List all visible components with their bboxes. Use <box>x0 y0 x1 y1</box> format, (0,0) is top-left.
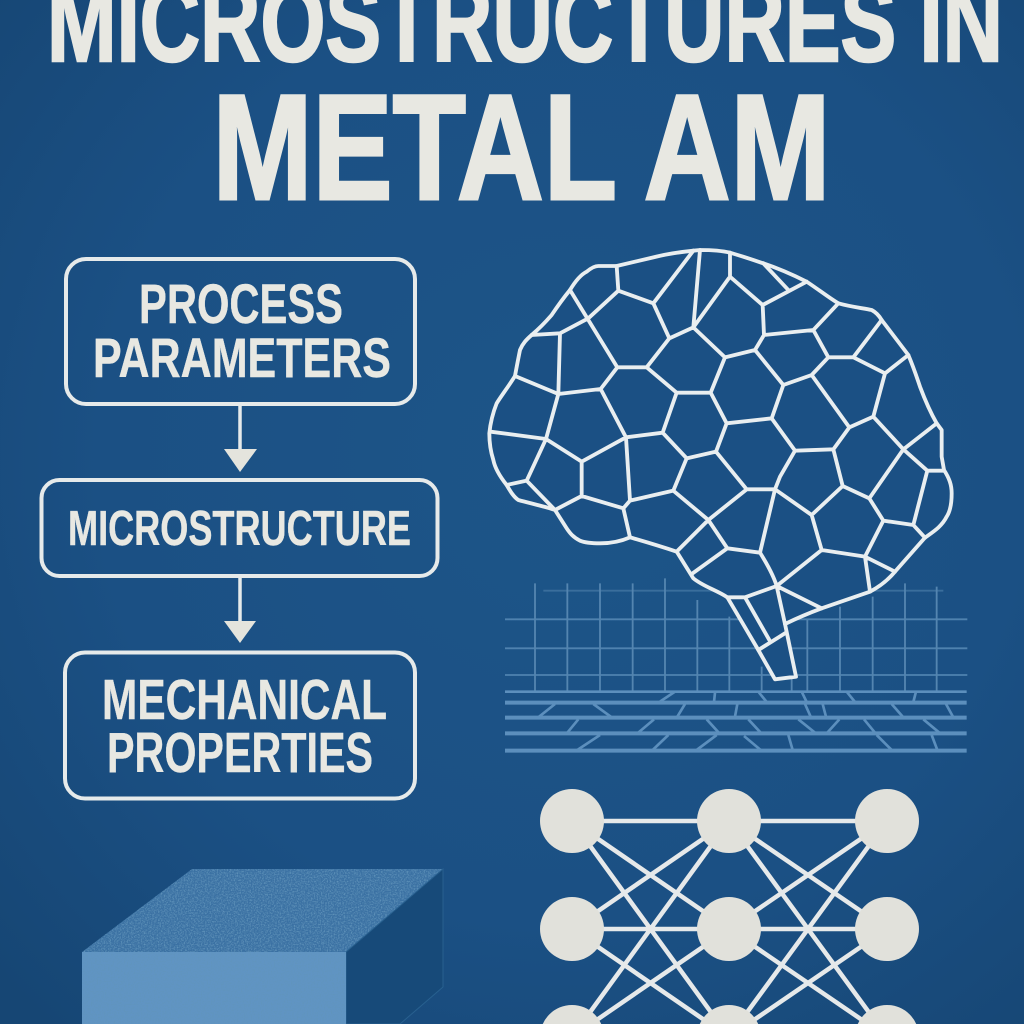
icon: brain made of grain cells <box>489 250 952 679</box>
arrow: parameters to microstructure <box>224 404 257 472</box>
box: process parameters <box>66 259 415 404</box>
box: mechanical properties: MECHANICAL <box>102 668 387 732</box>
box: process parameters: PROCESS <box>139 272 343 335</box>
block right face <box>346 869 443 1024</box>
arrow: microstructure to properties <box>224 576 256 643</box>
box: microstructure: MICROSTRUCTURE <box>68 502 411 556</box>
network nodes <box>540 789 919 1024</box>
brain outline <box>489 250 952 679</box>
block front face <box>82 952 346 1024</box>
panel: flowchart <box>42 259 438 798</box>
chart: neural network <box>540 789 919 1024</box>
vertical and horizontal grid lines <box>505 578 967 692</box>
grain boundaries <box>491 250 944 650</box>
floor lines <box>505 692 967 751</box>
network connections <box>572 821 887 1024</box>
box: mechanical properties: PROPERTIES <box>107 721 373 785</box>
icon: metal block <box>82 869 443 1024</box>
chart: background grid and layered floor <box>505 578 967 751</box>
block top face <box>82 869 443 952</box>
box: microstructure <box>42 480 438 576</box>
title: METAL AM <box>212 63 830 231</box>
title <box>47 0 1003 231</box>
box: mechanical properties <box>65 652 415 798</box>
box: process parameters: PARAMETERS <box>93 326 391 389</box>
